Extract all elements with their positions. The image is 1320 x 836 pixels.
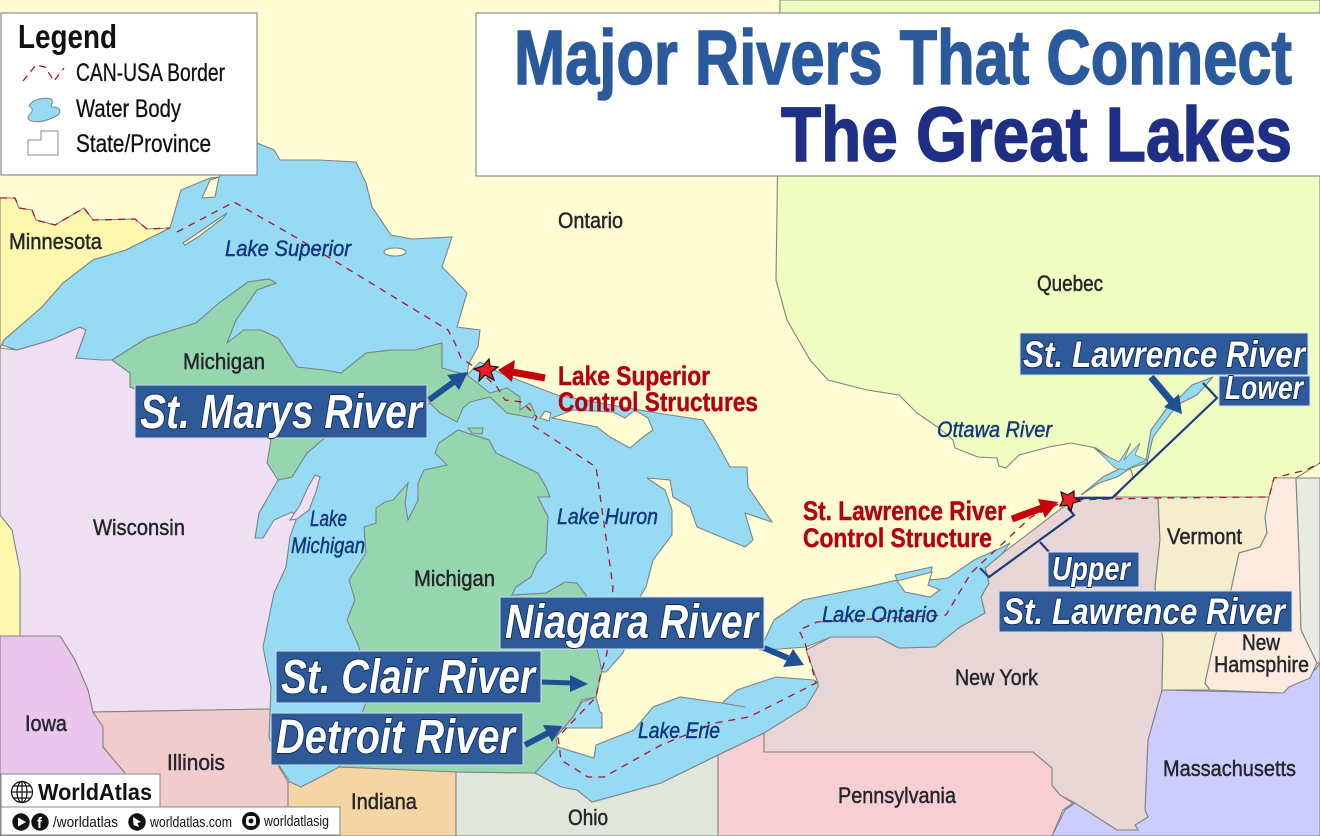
text: /worldatlas: /worldatlas bbox=[53, 814, 118, 831]
state labels bbox=[9, 208, 1309, 830]
river: Ottawa mouth bbox=[1094, 443, 1147, 470]
icon: instagram bbox=[242, 812, 260, 830]
icon: star St. Lawrence bbox=[1060, 491, 1080, 511]
arrow: Niagara River bbox=[764, 648, 804, 667]
region: Indiana bbox=[288, 767, 456, 836]
label: Niagara River: Niagara River bbox=[505, 596, 760, 649]
island: Prince Edward peninsula bbox=[897, 572, 940, 597]
text: worldatlas.com: worldatlas.com bbox=[149, 814, 232, 831]
water labels: Lake Superior bbox=[225, 236, 353, 261]
state labels: Massachusetts bbox=[1163, 756, 1296, 781]
label: Upper: Upper bbox=[1052, 550, 1132, 587]
region: lower Michigan bbox=[300, 430, 602, 773]
state labels: Hamsphire bbox=[1214, 652, 1309, 677]
region: Ohio bbox=[456, 755, 718, 836]
icon: cursor bbox=[128, 813, 146, 831]
region: upper Michigan peninsula bbox=[112, 279, 535, 480]
arrow: St. Marys River bbox=[429, 372, 468, 400]
label: Lake Superior Control Structures bbox=[558, 361, 758, 417]
region: Quebec bbox=[776, 0, 1320, 497]
lake: Erie bbox=[535, 677, 818, 802]
arrow: Lake Superior Control Structures bbox=[498, 360, 545, 382]
state labels: Michigan bbox=[183, 349, 265, 374]
region: Minnesota south strip bbox=[0, 515, 20, 636]
state labels: Iowa bbox=[25, 711, 68, 736]
state labels: Pennsylvania bbox=[838, 783, 957, 808]
legend heading: Legend bbox=[18, 18, 117, 55]
state labels: Illinois bbox=[167, 750, 225, 775]
state labels: Ohio bbox=[568, 805, 608, 830]
icon: youtube bbox=[12, 813, 30, 831]
label: St. Clair River: St. Clair River bbox=[281, 651, 537, 704]
lake: Superior bbox=[2, 143, 480, 375]
label: Lower: Lower bbox=[1225, 369, 1305, 406]
bracket tick: Upper bbox=[1040, 542, 1049, 552]
state labels: Michigan bbox=[414, 566, 495, 591]
state labels: Ontario bbox=[558, 208, 623, 233]
islands: Isle Royale, Manitoulin and others bbox=[183, 177, 653, 448]
state labels: Indiana bbox=[351, 789, 418, 814]
water labels bbox=[225, 236, 1054, 743]
bracket: Upper St. Lawrence bbox=[980, 508, 1074, 577]
border: CAN-USA dashed line bbox=[0, 198, 1320, 777]
state labels: New York bbox=[955, 665, 1039, 690]
region: New Hampshire bbox=[1205, 478, 1317, 693]
lake: St. Clair bbox=[556, 697, 602, 737]
water labels: Lake Huron bbox=[557, 504, 658, 529]
island: Door Peninsula bbox=[290, 475, 320, 520]
brand name: WorldAtlas bbox=[38, 779, 152, 805]
icon: globe bbox=[12, 782, 32, 802]
icon: facebook: f bbox=[37, 815, 43, 832]
region: Massachusetts bbox=[1052, 663, 1320, 836]
region: Wisconsin bbox=[0, 327, 300, 712]
label: St. Marys River: St. Marys River bbox=[140, 386, 424, 439]
label: Lake Superior Control Structures: Lake Superior bbox=[558, 361, 710, 391]
state labels: Minnesota bbox=[9, 229, 103, 254]
legend icon: border bbox=[23, 65, 64, 81]
legend panel bbox=[1, 13, 257, 175]
region: Iowa bbox=[0, 636, 125, 836]
label: Detroit River: Detroit River bbox=[276, 711, 517, 764]
state labels: Wisconsin bbox=[93, 515, 185, 540]
label: St. Lawrence River Control Structure: Control Structure bbox=[803, 523, 992, 553]
legend text: border: CAN-USA Border bbox=[76, 59, 225, 87]
water labels: Lake Ontario bbox=[822, 602, 937, 627]
lakes: Michigan and Huron bbox=[255, 362, 772, 787]
legend text: state: State/Province bbox=[76, 130, 211, 158]
legend icon: state bbox=[28, 131, 58, 155]
label: Lake Superior Control Structures: Control Structures bbox=[558, 387, 758, 417]
water labels: Lake bbox=[310, 506, 347, 531]
region: Pennsylvania bbox=[718, 733, 1073, 836]
region: Maine bbox=[1296, 478, 1320, 663]
label: St. Lawrence River Control Structure: St. Lawrence River bbox=[803, 496, 1006, 526]
label: St. Lawrence River Control Structure bbox=[803, 496, 1006, 553]
title panel bbox=[476, 13, 1320, 178]
water labels: Michigan bbox=[291, 533, 365, 558]
brand panel: WorldAtlas bbox=[1, 774, 340, 835]
state labels: Quebec bbox=[1037, 271, 1103, 296]
region: Minnesota bbox=[0, 198, 170, 348]
bracket: Lower St. Lawrence bbox=[1076, 383, 1217, 498]
arrow: St. Lawrence River bbox=[1151, 377, 1182, 414]
lake: Ontario bbox=[760, 543, 1010, 650]
text: worldatlasig: worldatlasig bbox=[263, 813, 329, 830]
state labels: New bbox=[1242, 630, 1280, 655]
legend icon: water bbox=[28, 98, 60, 122]
arrow: St. Lawrence River Control Structure bbox=[1012, 499, 1058, 519]
region: New York bbox=[764, 497, 1163, 830]
arrow: St. Clair River bbox=[542, 675, 588, 692]
river: St. Lawrence bbox=[1081, 377, 1213, 495]
region: Illinois bbox=[93, 709, 288, 836]
arrow: Detroit River bbox=[525, 725, 562, 745]
icon: facebook bbox=[31, 813, 49, 832]
state labels: Vermont bbox=[1167, 524, 1242, 549]
water labels: Lake Erie bbox=[638, 718, 720, 743]
icon: star Lake Superior bbox=[474, 359, 498, 381]
region: Vermont bbox=[1155, 497, 1269, 690]
water labels: Ottawa River bbox=[937, 417, 1054, 442]
legend text: water: Water Body bbox=[76, 95, 181, 123]
